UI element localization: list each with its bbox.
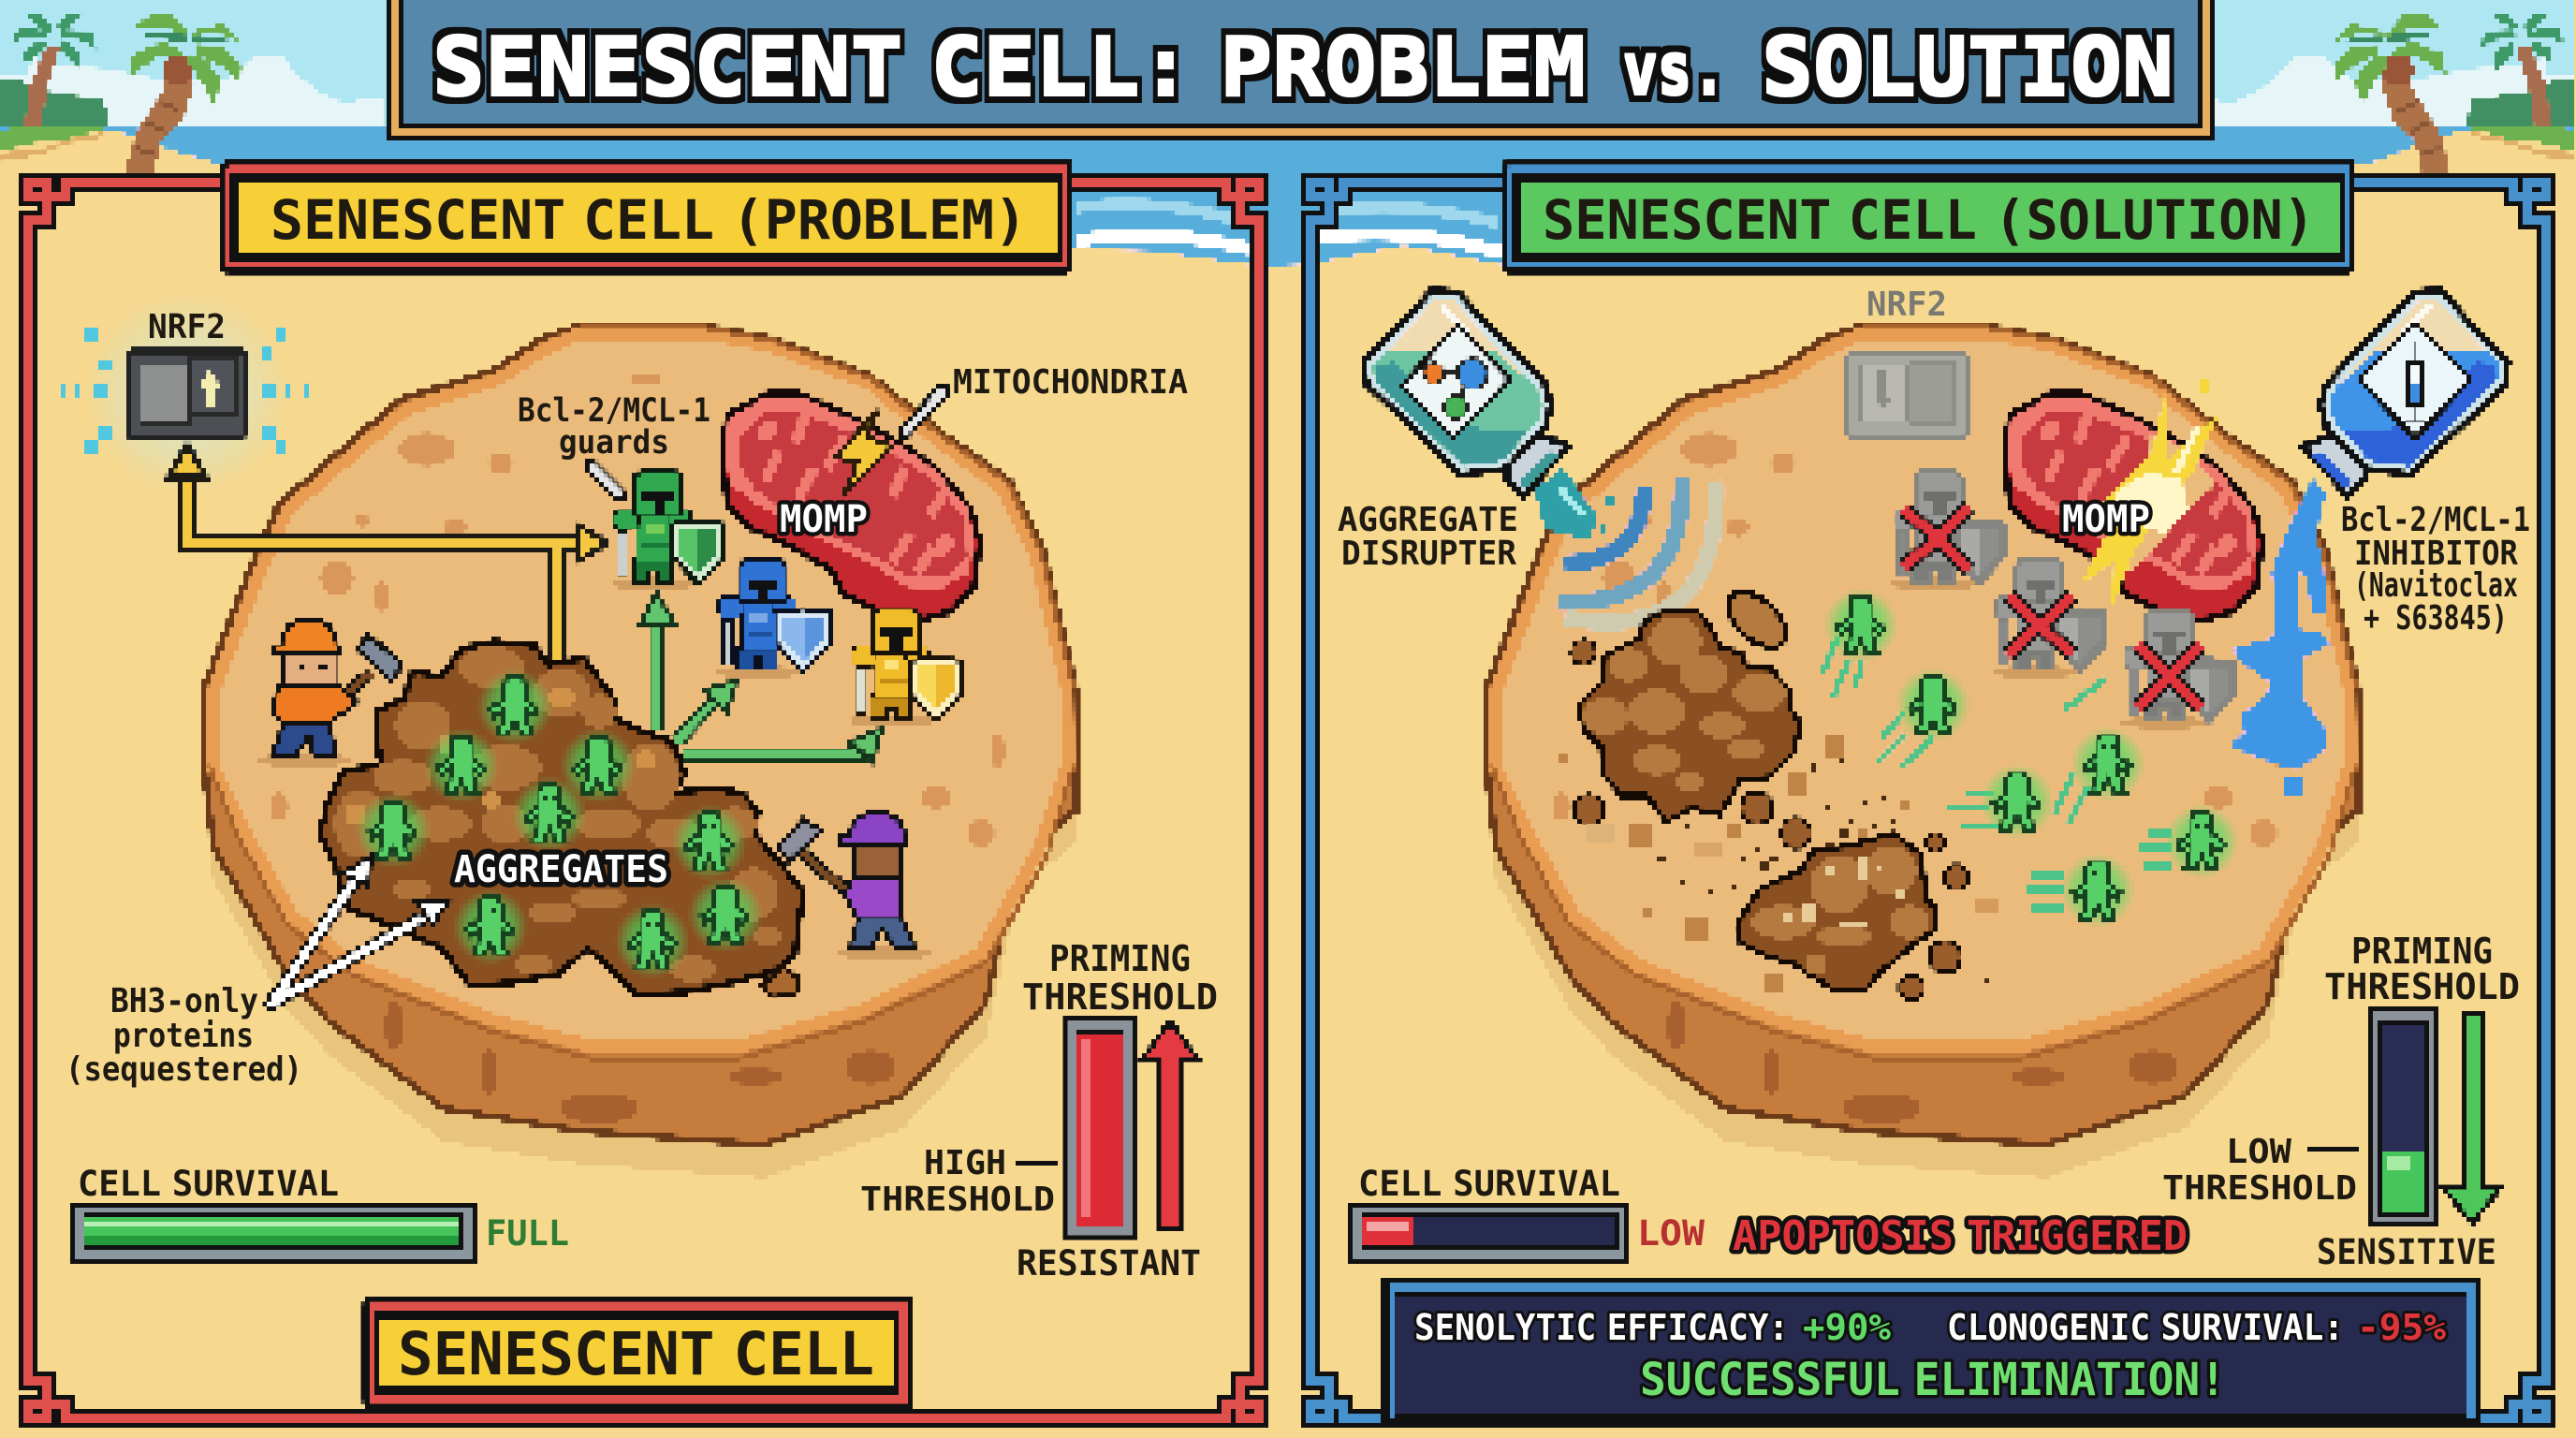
pointer: mitochondria [905,391,943,433]
panel frame [1310,183,2547,1417]
label: priming threshold [2324,931,2520,1007]
label: apoptosis triggered: APOPTOSIS TRIGGERED [1733,1212,2188,1260]
cell survival bar [74,1206,474,1260]
label: low threshold: THRESHOLD [2162,1169,2357,1208]
labels: solution panel [1338,188,2530,1406]
stat: clonogenic survival: CLONOGENIC SURVIVAL: [1947,1307,2344,1348]
guard: yellow knight [848,609,962,727]
label: high threshold: THRESHOLD [860,1181,1055,1219]
label: low threshold [2162,1133,2357,1208]
priming threshold gauge [1067,1020,1134,1236]
stat: senolytic efficacy: +90% [1803,1307,1891,1348]
green arrows to guards [640,593,882,762]
label: priming threshold: PRIMING [1049,938,1191,979]
island and palm trees: left [0,12,242,175]
arrow: threshold down [2445,1015,2499,1224]
label: cell survival: CELL SURVIVAL [78,1164,339,1204]
label: guards: Bcl-2/MCL-1 [518,392,710,430]
sequestered BH3-only proteins [356,669,763,978]
panel frame [28,183,1260,1417]
bottle: aggregate disrupter [1364,290,1568,496]
guard: grey knight one [1891,472,2005,591]
heading: problem: SENESCENT CELL (PROBLEM) [271,188,1027,252]
shore waves [1076,204,1498,227]
threshold tick [2306,1148,2360,1153]
label: inhibitor [2341,501,2530,638]
title text: SOLUTION [1762,22,2174,114]
panel: senescent cell problem [28,163,1260,1417]
label: sensitive: SENSITIVE [2317,1232,2496,1272]
label: guards: guards [559,424,669,462]
label: inhibitor: Bcl-2/MCL-1 [2341,501,2530,539]
explosion [2080,393,2220,609]
label: aggregate disrupter: AGGREGATE [1338,501,1518,539]
footer text: SENESCENT CELL [398,1320,874,1388]
aggregates [320,641,803,997]
icon: lightning bolt [835,410,891,495]
wave rings from disrupter [1557,477,1716,622]
clouds [0,54,2576,129]
result: successful elimination: SUCCESSFUL ELIMINATION! [1640,1354,2226,1406]
guard: grey knight two [1992,560,2106,679]
title banner [387,0,2215,140]
heading: solution: SENESCENT CELL (SOLUTION) [1543,188,2315,252]
arrows: BH3-only to aggregates [271,857,449,1004]
teal stream [1535,468,1616,540]
label: priming threshold: THRESHOLD [2324,966,2520,1007]
label: cell survival: CELL SURVIVAL [1358,1164,1620,1204]
title text [432,22,2174,114]
label: priming threshold: THRESHOLD [1022,976,1218,1018]
island and palm trees: right [2334,12,2576,175]
label: NRF2: NRF2 [148,308,226,346]
label: low: LOW [1637,1213,1705,1254]
freed BH3-only proteins [1822,588,2239,928]
label: aggregate disrupter: DISRUPTER [1341,535,1516,573]
mitochondrion damaged [2005,379,2262,621]
worker: orange [257,619,402,768]
blue inhibitor stream and pool [2231,478,2329,794]
icon: NRF2 switch [62,290,310,496]
title text: vs. [1623,27,1726,110]
arrow: threshold up [1144,1021,1196,1230]
label: inhibitor: INHIBITOR [2354,535,2518,573]
label: BH3-only proteins: proteins [113,1017,254,1055]
label: MOMP: MOMP [780,498,868,541]
pointer: guards [592,466,620,494]
label: priming threshold [1022,938,1218,1018]
label: resistant: RESISTANT [1017,1243,1201,1284]
label: priming threshold: PRIMING [2351,931,2493,972]
broken aggregates [1557,582,1999,1000]
title text: SENESCENT CELL: PROBLEM [432,22,1586,114]
crack through mitochondrion [2098,432,2216,579]
cell body [204,327,1076,1178]
guard: grey knight three [2121,610,2235,729]
icon: NRF2 switch off [1848,352,1967,436]
label: inhibitor: + S63845) [2364,599,2508,638]
priming threshold gauge low [2369,1010,2436,1225]
label: aggregate disrupter [1338,501,1518,573]
disabled guards [1891,472,2235,729]
label: BH3-only proteins: BH3-only [110,982,258,1020]
label: BH3-only proteins: (sequestered) [66,1050,302,1089]
guard: green knight [610,472,724,591]
cell survival bar low [1352,1206,1627,1260]
threshold tick [1016,1159,1057,1165]
bottle: Bcl-2 inhibitor [2304,290,2508,496]
stat: senolytic efficacy: SENOLYTIC EFFICACY: [1414,1307,1789,1348]
label: NRF2 off: NRF2 [1866,286,1947,324]
header box: problem [224,163,1070,271]
label: inhibitor: (Navitoclax [2354,566,2518,605]
stat: clonogenic survival: -95% [2357,1307,2446,1348]
label: MOMP: MOMP [2062,498,2150,541]
label: mitochondria: MITOCHONDRIA [953,363,1188,402]
mitochondrion [723,393,980,621]
label: guards [518,392,710,462]
label: aggregates: AGGREGATES [454,848,668,891]
label: low threshold: LOW [2226,1133,2291,1171]
cell body [1486,327,2358,1178]
header box: solution [1505,163,2352,271]
results panel [1385,1282,2477,1423]
label: high threshold [860,1144,1055,1219]
yellow arrows from aggregates to NRF2 and guards [168,445,608,667]
panel: senescent cell solution [1310,163,2547,1423]
guard: blue knight [715,560,829,679]
footer box: senescent cell [366,1300,911,1405]
label: full: FULL [486,1213,569,1254]
label: BH3-only proteins [66,982,302,1089]
labels: problem panel [66,188,1218,1388]
worker: purple [777,813,931,961]
label: high threshold: HIGH [924,1144,1006,1182]
